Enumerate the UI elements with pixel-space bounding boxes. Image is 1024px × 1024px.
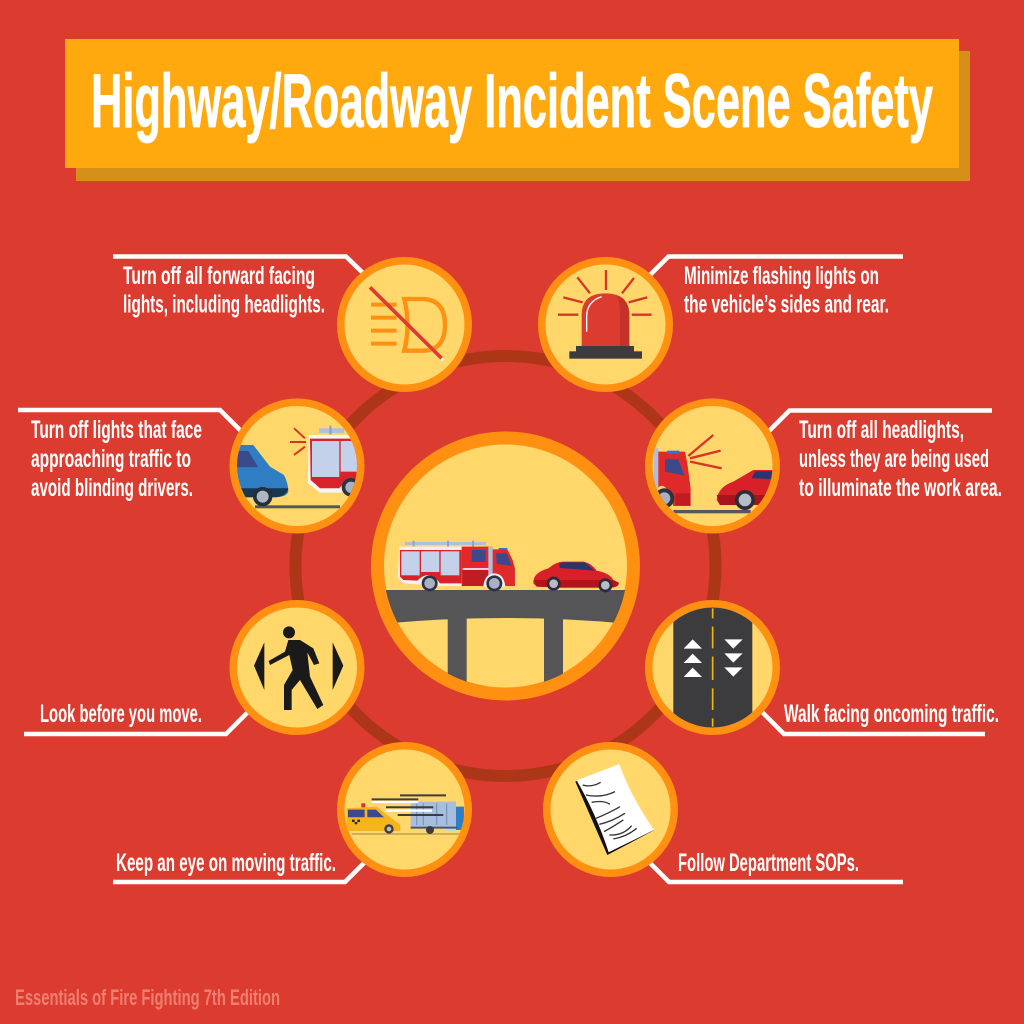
- leader line: [24, 712, 248, 734]
- icon: taxi and truck: [341, 746, 468, 873]
- icon: road: [649, 604, 776, 731]
- leader line: [650, 863, 903, 882]
- caption: Minimize flashing lights on: [684, 262, 879, 290]
- icon: headlight off: [341, 261, 468, 388]
- caption: Look before you move.: [40, 700, 202, 728]
- leader line: [18, 410, 241, 431]
- icon: van and fire truck: [233, 402, 361, 530]
- caption: [799, 416, 1002, 502]
- panel: moving traffic: [113, 746, 468, 882]
- icon: pedestrian: [233, 604, 361, 731]
- caption: approaching traffic to: [31, 445, 191, 473]
- fire truck: [398, 541, 515, 591]
- red car: [533, 562, 619, 592]
- panel: headlights: [649, 402, 1002, 530]
- leader line: [113, 256, 364, 274]
- leader line: [761, 711, 985, 734]
- caption: avoid blinding drivers.: [31, 474, 193, 502]
- icon: document: [547, 746, 674, 873]
- panel: walk facing traffic: [649, 604, 999, 734]
- panel: department SOPs: [547, 746, 903, 882]
- caption: Turn off all forward facing: [123, 262, 315, 290]
- caption: lights, including headlights.: [123, 290, 325, 318]
- panel: lights facing approaching traffic: [18, 402, 361, 530]
- panel: look before you move: [24, 604, 361, 734]
- icon: warning beacon: [542, 261, 669, 388]
- caption: [31, 416, 202, 502]
- caption: the vehicle’s sides and rear.: [684, 290, 889, 318]
- caption: Keep an eye on moving traffic.: [116, 849, 336, 877]
- leader line: [113, 862, 365, 882]
- leader line: [769, 410, 992, 431]
- source credit: Essentials of Fire Fighting 7th Edition: [15, 985, 280, 1010]
- connecting ring: [296, 356, 716, 776]
- leader line: [650, 256, 903, 275]
- panel: forward facing lights: [113, 256, 468, 388]
- icon: fire truck and car: [649, 402, 777, 530]
- panel: central bridge scene: [378, 438, 634, 700]
- panel: flashing lights: [542, 256, 903, 388]
- caption: Follow Department SOPs.: [678, 849, 859, 877]
- bridge: [386, 590, 626, 682]
- title banner: [65, 39, 970, 181]
- caption: [684, 262, 889, 318]
- caption: Turn off lights that face: [31, 416, 202, 444]
- caption: [123, 262, 325, 318]
